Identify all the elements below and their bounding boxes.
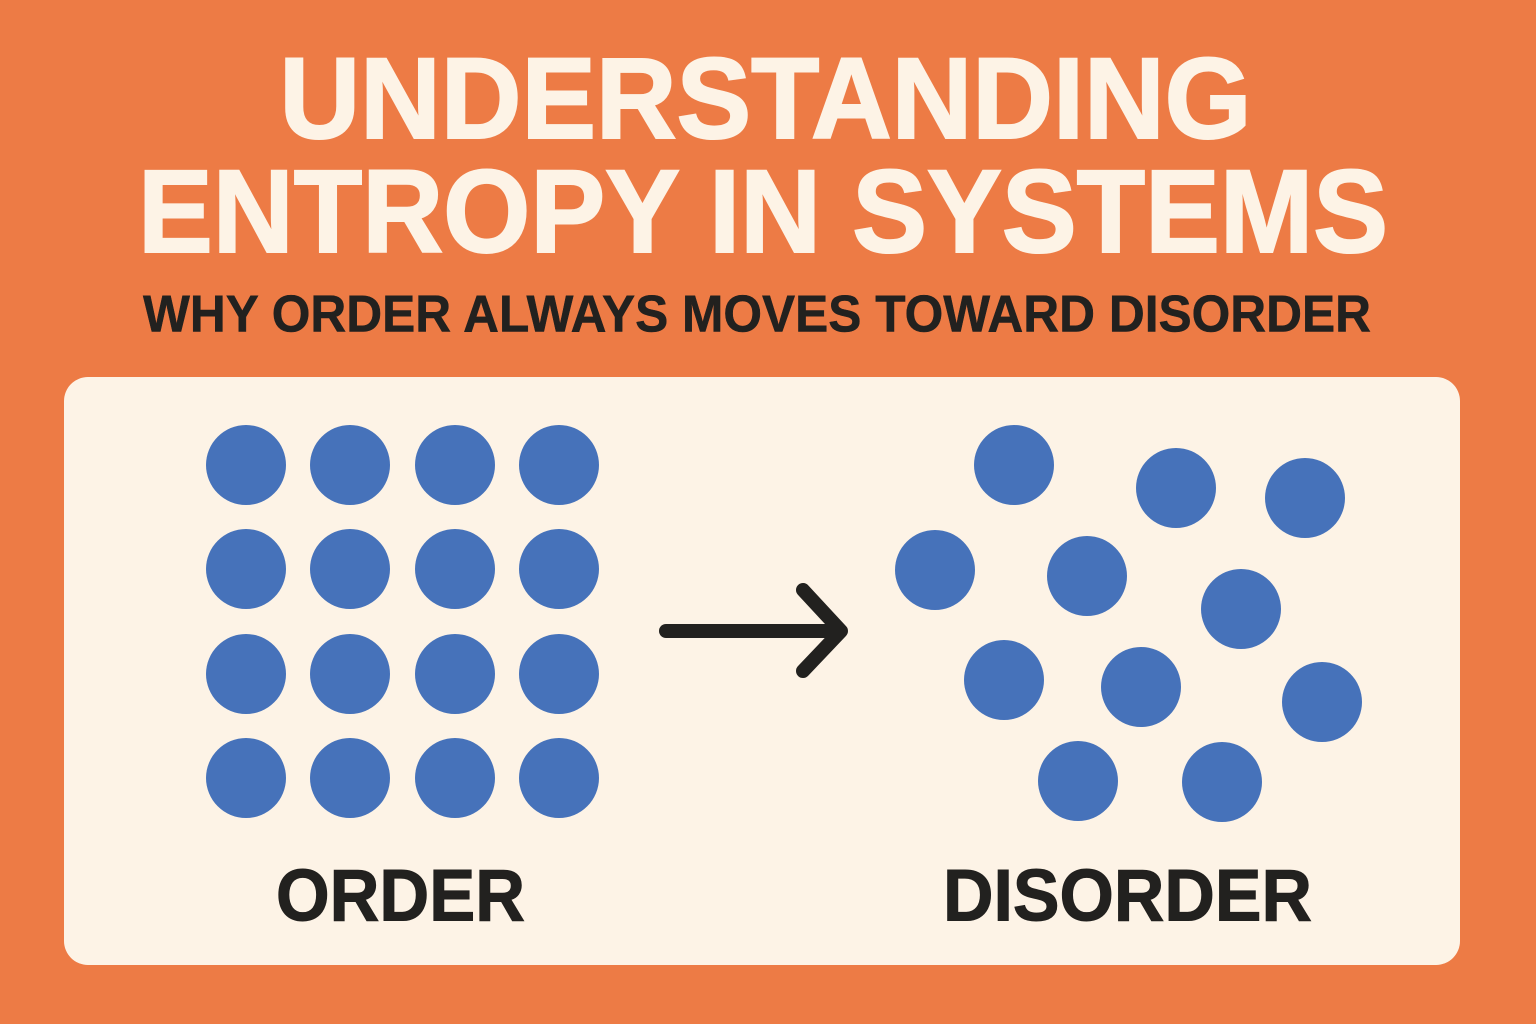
title line 1: UNDERSTANDING (280, 35, 1252, 163)
label: disorder: DISORDER (943, 856, 1312, 936)
title line 2: ENTROPY IN SYSTEMS (138, 146, 1388, 278)
panel: order to disorder (64, 377, 1460, 965)
disorder scattered dots (895, 425, 1362, 822)
arrow (666, 590, 841, 671)
panel background (64, 377, 1460, 965)
order dot grid (206, 425, 599, 818)
subtitle: WHY ORDER ALWAYS MOVES TOWARD DISORDER (143, 286, 1371, 344)
label: order: ORDER (276, 856, 525, 936)
